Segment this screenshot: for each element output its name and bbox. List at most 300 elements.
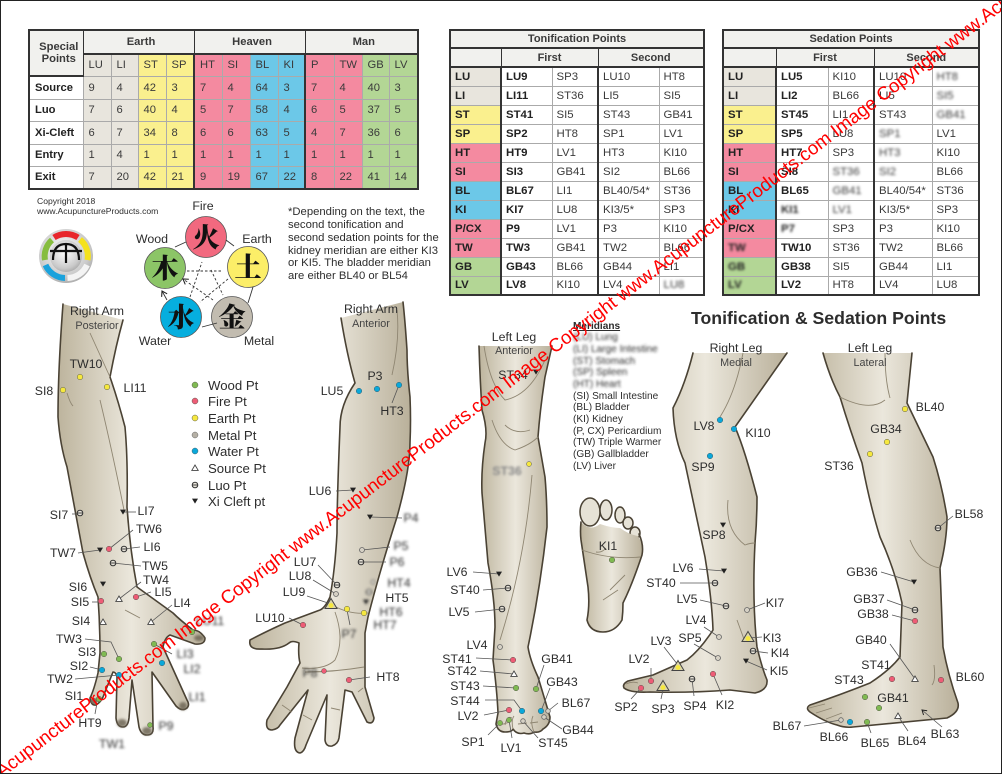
footnote text: or KI5. The bladder meridian bbox=[288, 257, 431, 269]
point: LV4 bbox=[467, 638, 502, 652]
table: special points: 63 bbox=[256, 126, 268, 138]
point: LI7: LI7 bbox=[137, 504, 155, 518]
point: ST43 bbox=[834, 673, 868, 700]
table: tonification points: KI bbox=[455, 204, 466, 216]
points: HT4 HT5 HT6 HT7: HT7 bbox=[373, 618, 397, 632]
meridians key: (P, CX) Pericardium bbox=[573, 426, 661, 437]
point: LV2 bbox=[458, 707, 512, 723]
point: LI3: LI3 bbox=[176, 647, 194, 661]
point: ST36: ST36 bbox=[492, 464, 522, 478]
point: ST45 bbox=[521, 719, 568, 750]
point: SP1: SP1 bbox=[461, 735, 485, 749]
point: ST34: ST34 bbox=[498, 368, 528, 382]
table: special points: 4 bbox=[228, 82, 234, 94]
table: tonification points: KI10 bbox=[556, 279, 580, 291]
figure: right arm anterior bbox=[250, 302, 419, 753]
point: P6 bbox=[358, 555, 405, 569]
point: TW5 bbox=[110, 559, 168, 573]
point: BL65 bbox=[861, 719, 890, 750]
table: special points: 1 bbox=[256, 149, 262, 161]
meridians key: (LU) Lung bbox=[573, 332, 618, 343]
point: SP3: SP3 bbox=[651, 702, 675, 716]
point: SI3 bbox=[78, 645, 107, 659]
point: LI6 bbox=[121, 540, 161, 554]
point: GB43: GB43 bbox=[546, 675, 578, 689]
footnote text: *Depending on the text, the bbox=[288, 206, 425, 218]
table: special points: 1 bbox=[340, 149, 346, 161]
point: HT3 bbox=[380, 382, 404, 418]
table: sedation points: LU bbox=[728, 71, 743, 83]
table: tonification points: TW2 bbox=[603, 242, 627, 254]
table: special points: 6 bbox=[395, 126, 401, 138]
figure: left leg anterior: Anterior bbox=[495, 345, 533, 357]
point: KI1: KI1 bbox=[599, 539, 617, 553]
meridians key: (SP) Spleen bbox=[573, 367, 627, 378]
point: LI11 bbox=[104, 381, 147, 395]
table: special points: 1 bbox=[144, 149, 150, 161]
table: special points: 1 bbox=[88, 149, 95, 161]
table: sedation points: Second bbox=[906, 52, 946, 64]
table: tonification points: SP2 bbox=[506, 128, 528, 140]
figure: right leg medial: Right Leg bbox=[710, 341, 762, 355]
table: sedation points: SI5 bbox=[832, 260, 850, 272]
point: P4 bbox=[367, 511, 419, 525]
table: tonification points: SP bbox=[455, 128, 470, 140]
table: special points: 1 bbox=[172, 149, 178, 161]
figure: left leg lateral bbox=[773, 341, 985, 750]
table: sedation points: First bbox=[813, 52, 837, 64]
point: SP5: SP5 bbox=[678, 631, 702, 645]
point: P8 bbox=[302, 666, 326, 680]
table: sedation points: KI10 bbox=[936, 222, 960, 234]
five elements diagram: 火 bbox=[192, 216, 220, 255]
table: tonification points: LV8 bbox=[506, 279, 526, 291]
table: tonification points: BL66 bbox=[664, 166, 690, 178]
point: SI3: SI3 bbox=[78, 645, 96, 659]
point: P8: P8 bbox=[302, 666, 318, 680]
table: tonification points: HT8 bbox=[664, 71, 685, 83]
point: LV2: LV2 bbox=[458, 709, 479, 723]
point: SI8: SI8 bbox=[35, 384, 53, 398]
point: TW2: TW2 bbox=[47, 672, 73, 686]
five elements diagram: Wood bbox=[136, 232, 168, 246]
table: tonification points: HT8 bbox=[556, 128, 578, 140]
point: LI1: LI1 bbox=[188, 690, 206, 704]
point: KI2 bbox=[710, 671, 734, 712]
point: TW6: TW6 bbox=[136, 522, 162, 536]
table: special points: 1 bbox=[368, 149, 374, 161]
point: LU6: LU6 bbox=[309, 484, 331, 498]
table: sedation points: LI1 bbox=[936, 260, 952, 272]
point: GB34 bbox=[870, 422, 902, 445]
table: tonification points: GB44 bbox=[603, 260, 632, 272]
point: P7 bbox=[341, 606, 357, 641]
point: SI2 bbox=[70, 659, 105, 673]
point: SP2 bbox=[614, 685, 644, 714]
table: tonification points: GB41 bbox=[664, 108, 693, 120]
point: ST44 bbox=[450, 694, 525, 714]
point: P3 bbox=[367, 369, 383, 392]
point: LV6 bbox=[673, 561, 727, 575]
table: special points: 36 bbox=[368, 126, 380, 138]
table: sedation points: KI1 bbox=[781, 204, 799, 216]
table: sedation points: BL bbox=[728, 184, 743, 196]
point: SP4 bbox=[683, 676, 707, 713]
point: SI7 bbox=[50, 508, 83, 522]
point: P5: P5 bbox=[393, 539, 409, 553]
point: BL58: BL58 bbox=[955, 507, 984, 521]
table: sedation points: KI10 bbox=[832, 71, 856, 83]
point: KI4: KI4 bbox=[771, 646, 789, 660]
table: tonification points: LV4 bbox=[603, 279, 622, 291]
table: special points: 20 bbox=[116, 171, 129, 183]
table: tonification points: First bbox=[538, 52, 561, 64]
table: sedation points: HT3 bbox=[879, 146, 901, 158]
point: BL63: BL63 bbox=[931, 727, 960, 741]
point: SI4: SI4 bbox=[72, 614, 90, 628]
table: special points: SP bbox=[172, 59, 186, 71]
point: TW4 bbox=[116, 573, 169, 601]
table: special points: 4 bbox=[172, 104, 178, 116]
point: LU7 bbox=[294, 555, 340, 588]
table: sedation points: LV4 bbox=[879, 279, 898, 291]
point: LV5 bbox=[449, 605, 505, 619]
table: special points: 7 bbox=[88, 104, 95, 116]
point: ST41 bbox=[861, 658, 895, 682]
table: special points: Luo bbox=[35, 104, 56, 116]
point: GB41 bbox=[533, 652, 573, 692]
point: P4: P4 bbox=[403, 511, 419, 525]
point: LU5: LU5 bbox=[321, 384, 343, 398]
main title: Tonification & Sedation Points bbox=[691, 308, 946, 328]
table: sedation points: ST36 bbox=[832, 242, 860, 254]
point: TW10 bbox=[70, 357, 103, 380]
table: special points: P bbox=[311, 59, 319, 71]
table: special points: 4 bbox=[284, 104, 290, 116]
table: special points: 42 bbox=[144, 171, 156, 183]
table: special points: 1 bbox=[311, 149, 317, 161]
point: BL64 bbox=[895, 713, 927, 748]
point: LU6 bbox=[309, 484, 356, 498]
figure: right arm posterior: Posterior bbox=[75, 320, 119, 332]
table: special points: 58 bbox=[256, 104, 268, 116]
table: special points: 7 bbox=[116, 126, 123, 138]
table: tonification points: KI7 bbox=[506, 204, 524, 216]
point: LU10: LU10 bbox=[255, 611, 285, 625]
point: GB44: GB44 bbox=[562, 723, 594, 737]
table: sedation points bbox=[722, 29, 980, 296]
point: ST43 bbox=[450, 679, 519, 693]
point: SI1 bbox=[65, 689, 102, 703]
table: tonification points: LV1 bbox=[556, 146, 576, 158]
table: sedation points: SI bbox=[728, 166, 739, 178]
table: sedation points: P/CX bbox=[728, 222, 755, 234]
point: KI7: KI7 bbox=[766, 596, 784, 610]
table: special points: 1 bbox=[284, 149, 290, 161]
point: TW6 bbox=[106, 522, 162, 552]
point: GB40: GB40 bbox=[855, 633, 887, 647]
point: LU7: LU7 bbox=[294, 555, 316, 569]
meridians key: Meridians bbox=[573, 321, 621, 332]
table: sedation points: SI2 bbox=[879, 166, 896, 178]
point: LI11: LI11 bbox=[123, 381, 147, 395]
table: sedation points: TW bbox=[728, 242, 746, 254]
table: tonification points: ST bbox=[455, 108, 470, 120]
table: sedation points: LU10 bbox=[879, 71, 906, 83]
table: special points: 6 bbox=[200, 126, 206, 138]
point: BL66: BL66 bbox=[820, 730, 849, 744]
five elements diagram: 土 bbox=[234, 246, 262, 285]
table: special points: Heaven bbox=[232, 36, 272, 48]
point: LU5 bbox=[321, 384, 362, 398]
table: tonification points: SI bbox=[455, 166, 466, 178]
figure: right leg medial: Medial bbox=[720, 357, 752, 369]
table: tonification points: ST43 bbox=[603, 108, 630, 120]
table: tonification points: LI1 bbox=[664, 260, 679, 272]
point: BL65: BL65 bbox=[861, 736, 890, 750]
table: sedation points: SI8 bbox=[781, 166, 798, 178]
table: special points: 14 bbox=[395, 171, 407, 183]
point: GB44 bbox=[542, 715, 594, 737]
point: GB37 bbox=[853, 592, 918, 613]
table: sedation points: SP bbox=[728, 128, 743, 140]
table: tonification points: TW3 bbox=[506, 242, 530, 254]
table: special points: 4 bbox=[311, 126, 317, 138]
point: TW1: TW1 bbox=[99, 737, 125, 751]
table: sedation points: SP3 bbox=[936, 204, 958, 216]
table: sedation points: LV1 bbox=[832, 204, 852, 216]
point: P5 bbox=[360, 539, 409, 553]
point: GB36: GB36 bbox=[846, 565, 878, 579]
points: HT4 HT5 HT6 HT7 bbox=[361, 576, 411, 632]
table: sedation points: GB41 bbox=[936, 108, 966, 120]
table: tonification points: P3 bbox=[603, 222, 617, 234]
point: GB41: GB41 bbox=[541, 652, 573, 666]
points: HT4 HT5 HT6 HT7: HT6 bbox=[379, 605, 403, 619]
five elements diagram: Water bbox=[139, 334, 171, 348]
point: SP9: SP9 bbox=[691, 460, 715, 474]
table: tonification points: GB41 bbox=[556, 166, 586, 178]
point: SP8: SP8 bbox=[702, 528, 726, 542]
point: LV4 bbox=[686, 613, 722, 640]
table: sedation points: LV1 bbox=[936, 128, 956, 140]
meridians key: (HT) Heart bbox=[573, 379, 621, 390]
figure: left leg anterior: Left Leg bbox=[492, 330, 536, 344]
table: sedation points: P7 bbox=[781, 222, 795, 234]
table: tonification points: ST36 bbox=[556, 90, 584, 102]
table: tonification points: BL bbox=[455, 184, 470, 196]
point: HT8 bbox=[346, 670, 400, 684]
legend: Luo Pt bbox=[208, 478, 246, 493]
point: LV3: LV3 bbox=[651, 634, 672, 648]
table: tonification points: Tonification Points bbox=[528, 33, 626, 45]
point: TW2 bbox=[47, 672, 122, 686]
table: special points: 40 bbox=[368, 82, 380, 94]
point: ST44: ST44 bbox=[450, 694, 480, 708]
point: GB36 bbox=[846, 565, 917, 585]
point: LI4: LI4 bbox=[173, 596, 191, 610]
point: SP1 bbox=[461, 720, 503, 749]
point: BL64: BL64 bbox=[898, 734, 927, 748]
figure: right arm posterior bbox=[35, 304, 224, 751]
table: special points: 41 bbox=[368, 171, 380, 183]
five elements diagram: Metal bbox=[244, 334, 274, 348]
point: SI6: SI6 bbox=[69, 580, 87, 594]
table: tonification points: SP1 bbox=[603, 128, 625, 140]
point: SI1: SI1 bbox=[65, 689, 83, 703]
table: special points: 6 bbox=[88, 126, 95, 138]
table: tonification points: LI11 bbox=[506, 90, 528, 102]
point: P3: P3 bbox=[367, 369, 383, 383]
legend bbox=[192, 378, 266, 509]
copyright note: www.AcupunctureProducts.com bbox=[36, 206, 158, 216]
table: special points: 5 bbox=[395, 104, 401, 116]
table: special points: KI bbox=[284, 59, 294, 71]
point: ST36: ST36 bbox=[824, 459, 854, 473]
table: sedation points: SP3 bbox=[832, 146, 854, 158]
point: TW10: TW10 bbox=[70, 357, 103, 371]
point: ST40: ST40 bbox=[450, 583, 480, 597]
table: sedation points: KI3/5* bbox=[879, 204, 910, 216]
point: HT8: HT8 bbox=[376, 670, 400, 684]
point: ST43: ST43 bbox=[450, 679, 480, 693]
footnote text: are either BL40 or BL54 bbox=[288, 270, 408, 282]
point: SI5 bbox=[71, 595, 104, 609]
table: sedation points: ST45 bbox=[781, 108, 808, 120]
figure: right arm anterior: Right Arm bbox=[344, 302, 398, 316]
legend: Source Pt bbox=[208, 461, 266, 476]
legend: Metal Pt bbox=[208, 428, 257, 443]
point: KI7 bbox=[744, 596, 784, 612]
point: LV4: LV4 bbox=[467, 638, 488, 652]
point: SI7: SI7 bbox=[50, 508, 68, 522]
five elements diagram: 水 bbox=[168, 296, 194, 335]
point: GB34: GB34 bbox=[870, 422, 902, 436]
point: SP3 bbox=[651, 680, 675, 716]
point: BL67 bbox=[773, 718, 843, 733]
point: LU8: LU8 bbox=[289, 569, 311, 583]
table: tonification points: HT9 bbox=[506, 146, 528, 158]
table: sedation points: BL66 bbox=[936, 166, 963, 178]
table: sedation points: HT8 bbox=[832, 279, 854, 291]
table: special points: 9 bbox=[88, 82, 95, 94]
table: tonification points: ST41 bbox=[506, 108, 533, 120]
point: BL63 bbox=[922, 710, 960, 741]
table: sedation points: HT7 bbox=[781, 146, 803, 158]
point: SP4: SP4 bbox=[683, 699, 707, 713]
table: special points: Exit bbox=[35, 171, 56, 183]
point: ST43: ST43 bbox=[834, 673, 864, 687]
point: BL67 bbox=[546, 696, 591, 713]
table: special points: 3 bbox=[172, 82, 178, 94]
table: sedation points: LV bbox=[728, 279, 742, 291]
table: special points: 9 bbox=[200, 171, 206, 183]
table: tonification points: LU10 bbox=[603, 71, 630, 83]
table: tonification points: BL66 bbox=[664, 242, 690, 254]
meridians key: (ST) Stomach bbox=[573, 356, 635, 367]
point: LI5 bbox=[133, 585, 172, 600]
table: sedation points: ST43 bbox=[879, 108, 906, 120]
point: GB41 bbox=[876, 691, 909, 711]
table: sedation points: TW10 bbox=[781, 242, 811, 254]
table: tonification points: SP3 bbox=[664, 204, 685, 216]
table: sedation points: BL66 bbox=[832, 90, 859, 102]
point: HT3: HT3 bbox=[380, 404, 404, 418]
table: special points: HT bbox=[200, 59, 215, 71]
meridians key bbox=[573, 321, 662, 472]
table: tonification points: KI3/5* bbox=[603, 204, 634, 216]
table: special points: LV bbox=[395, 59, 407, 71]
point: KI2: KI2 bbox=[716, 698, 734, 712]
table: special points: Special bbox=[39, 41, 78, 53]
table: tonification points: Second bbox=[631, 52, 671, 64]
footnote text: kidney meridian are either KI3 bbox=[288, 245, 438, 257]
table: special points: 5 bbox=[340, 104, 346, 116]
legend: Earth Pt bbox=[208, 411, 256, 426]
table: special points: 3 bbox=[284, 82, 290, 94]
table: tonification points: SI3 bbox=[506, 166, 523, 178]
point: ST40 bbox=[450, 583, 511, 597]
meridians key: (SI) Small Intestine bbox=[573, 391, 659, 402]
table: sedation points: ST36 bbox=[832, 166, 860, 178]
five elements diagram bbox=[136, 199, 274, 348]
table: sedation points: LV2 bbox=[781, 279, 801, 291]
table: tonification points: KI10 bbox=[664, 146, 687, 158]
point: KI3: KI3 bbox=[763, 631, 781, 645]
meridians key: (LI) Large Intestine bbox=[573, 344, 658, 355]
point: LU11 bbox=[189, 614, 224, 635]
table: tonification points: SP3 bbox=[556, 71, 578, 83]
point: TW5: TW5 bbox=[142, 559, 168, 573]
table: tonification points bbox=[449, 29, 705, 296]
table: sedation points: SI5 bbox=[936, 90, 954, 102]
table: sedation points: LI bbox=[728, 90, 738, 102]
point: TW7: TW7 bbox=[50, 546, 76, 560]
point: ST45: ST45 bbox=[538, 736, 568, 750]
table: special points: Man bbox=[353, 36, 375, 48]
footnote text: second tonification and bbox=[288, 219, 404, 231]
point: LV2 bbox=[629, 652, 654, 684]
five elements diagram: 金 bbox=[218, 296, 246, 335]
point: LV5: LV5 bbox=[677, 592, 698, 606]
five elements diagram: Earth bbox=[242, 232, 272, 246]
table: sedation points: SP5 bbox=[781, 128, 803, 140]
table: tonification points: P9 bbox=[506, 222, 520, 234]
table: tonification points: HT3 bbox=[603, 146, 625, 158]
meridians key: (TW) Triple Warmer bbox=[573, 437, 662, 448]
table: tonification points: BL66 bbox=[556, 260, 583, 272]
table: special points: 7 bbox=[88, 171, 95, 183]
meridians key: (BL) Bladder bbox=[573, 402, 630, 413]
point: ST36 bbox=[824, 451, 873, 473]
footnote text bbox=[288, 206, 439, 282]
point: TW4: TW4 bbox=[143, 573, 169, 587]
table: tonification points: SI5 bbox=[556, 108, 574, 120]
figure: foot sole bbox=[580, 498, 643, 632]
legend: Wood Pt bbox=[208, 378, 259, 393]
point: ST42: ST42 bbox=[447, 664, 477, 678]
table: tonification points: BL67 bbox=[506, 184, 534, 196]
point: LU9: LU9 bbox=[283, 585, 305, 599]
point: KI4 bbox=[750, 646, 789, 660]
point: LI2 bbox=[159, 660, 201, 676]
point: LV8 bbox=[694, 417, 723, 433]
table: special points: 22 bbox=[340, 171, 352, 183]
table: sedation points: GB bbox=[728, 260, 745, 272]
point: LV6: LV6 bbox=[447, 565, 468, 579]
point: LV4: LV4 bbox=[686, 613, 707, 627]
table: special points: 7 bbox=[200, 82, 206, 94]
